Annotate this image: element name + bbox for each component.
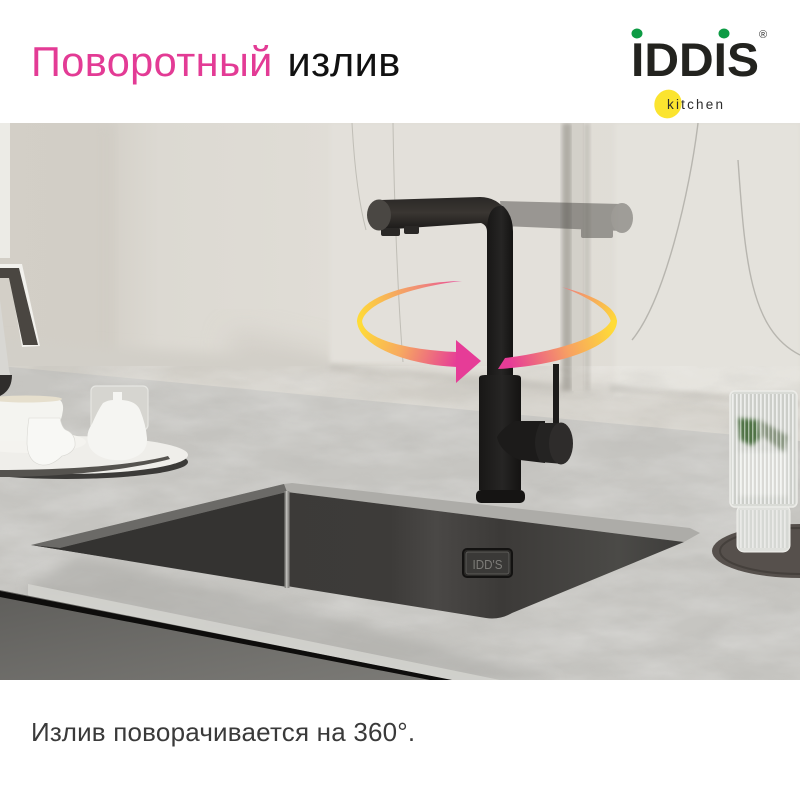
arrow head — [456, 340, 481, 383]
small jug — [27, 418, 75, 465]
handle body — [497, 421, 545, 463]
kettle glass — [0, 300, 12, 396]
aerators — [381, 228, 400, 236]
kettle handle — [0, 264, 40, 347]
icon: green dot right — [718, 28, 730, 38]
title: излив — [288, 38, 401, 85]
sink basin — [31, 492, 684, 618]
arrow left lower — [357, 320, 457, 367]
seam — [284, 491, 290, 588]
caption: Излив поворачивается на 360°. — [31, 717, 415, 747]
saucer — [73, 435, 78, 436]
cabinet front — [0, 590, 452, 680]
icon: green dot left — [632, 28, 642, 38]
column — [487, 206, 513, 378]
rotation arrow — [357, 281, 617, 383]
rim — [31, 483, 700, 548]
faucet ghost position — [500, 201, 633, 238]
glass behind jug — [91, 386, 148, 430]
foot — [476, 490, 525, 503]
spout end — [367, 200, 391, 230]
arrow right upper — [562, 287, 617, 322]
handle cap — [545, 423, 558, 464]
faucet — [367, 197, 573, 503]
large jug — [88, 392, 147, 441]
wall — [0, 123, 800, 453]
spout — [379, 197, 513, 232]
logo subtitle: kitchen — [667, 97, 725, 112]
photo: kitchen scene — [0, 123, 800, 680]
sink logo plate — [463, 549, 512, 577]
glass base — [737, 505, 790, 552]
icon: yellow blob — [650, 85, 686, 123]
sink — [31, 483, 700, 618]
counter shadow line — [0, 591, 452, 680]
glass cup — [730, 391, 797, 507]
registered mark: ® — [759, 29, 767, 41]
tableware — [0, 264, 188, 479]
logo wordmark: IDDIS — [631, 33, 759, 86]
logo: IDDIS kitchen — [631, 28, 767, 123]
glass ribs — [732, 394, 795, 504]
leaves — [738, 418, 760, 446]
bowl — [0, 400, 63, 432]
mat — [712, 524, 800, 578]
title: Поворотный — [31, 38, 273, 85]
tray — [0, 436, 188, 479]
ribbed glass on mat — [712, 391, 800, 578]
countertop — [0, 366, 800, 680]
sink logo plate: IDD'S — [472, 557, 503, 572]
lever — [553, 364, 559, 426]
arrow right lower — [498, 320, 617, 369]
base — [479, 375, 521, 490]
arrow left upper — [357, 281, 462, 322]
